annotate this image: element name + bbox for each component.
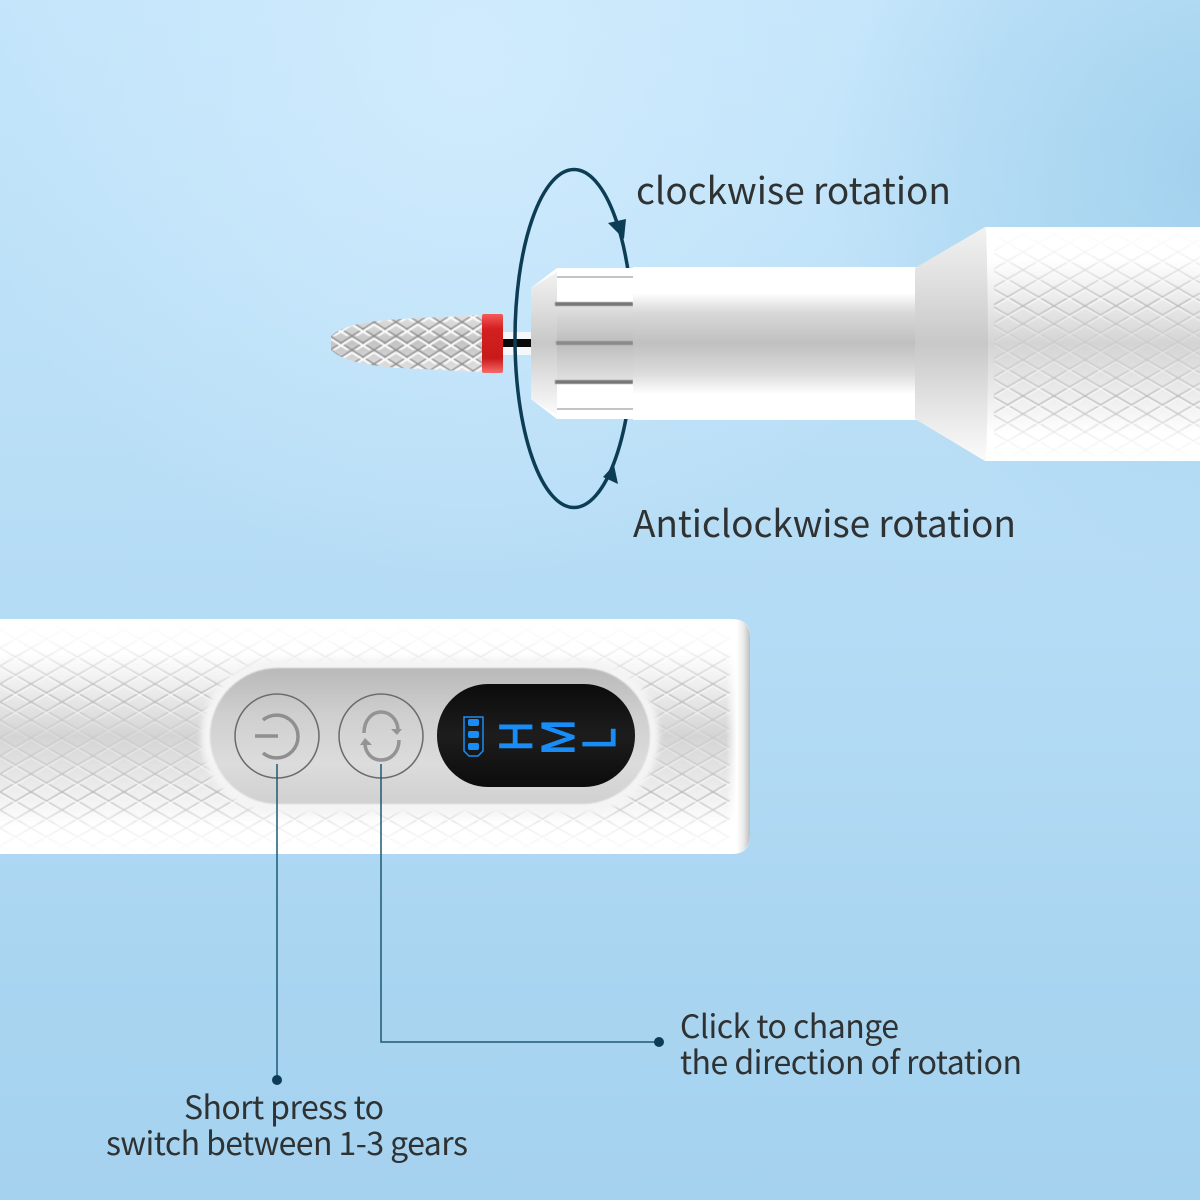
caption: change direction: Click to change	[680, 1002, 899, 1048]
handle body	[0, 619, 750, 854]
gear letters: H	[492, 722, 543, 751]
control panel	[210, 668, 650, 804]
gear letters	[492, 719, 625, 755]
caption: switch gears	[106, 1083, 468, 1165]
rotation ring with arrows	[515, 170, 633, 508]
knurled grip	[986, 227, 1200, 461]
label: anticlockwise rotation: Anticlockwise rotation	[633, 494, 1016, 548]
control recess halo	[201, 659, 659, 814]
caption: change direction	[680, 1002, 1022, 1084]
gear letters: L	[573, 728, 625, 749]
caption: change direction: the direction of rotation	[680, 1038, 1022, 1084]
upper tool: nail drill bit	[328, 312, 532, 374]
neck	[633, 267, 917, 420]
collet shaded facets	[531, 272, 635, 415]
cone	[915, 227, 992, 461]
red collar	[482, 314, 503, 373]
bit shaft	[500, 332, 532, 355]
gear letters: M	[534, 719, 584, 755]
display screen	[437, 684, 635, 787]
caption: switch gears: Short press to	[184, 1083, 384, 1129]
clockwise arrowhead	[608, 219, 626, 239]
leader line: power button	[272, 764, 282, 1085]
battery indicator	[464, 717, 483, 756]
caption: switch gears: switch between 1-3 gears	[106, 1119, 468, 1165]
handle end cap	[726, 620, 750, 853]
anticlockwise arrowhead	[603, 465, 618, 484]
upper tool: white handle	[531, 227, 1200, 461]
label: clockwise rotation: clockwise rotation	[636, 161, 951, 215]
power button	[235, 694, 319, 778]
carbide bit head	[331, 315, 482, 372]
lower tool: handle	[0, 619, 750, 854]
collet nose	[531, 268, 640, 419]
direction button	[339, 694, 423, 778]
leader line: direction button	[381, 764, 664, 1047]
knurled texture	[0, 644, 730, 838]
